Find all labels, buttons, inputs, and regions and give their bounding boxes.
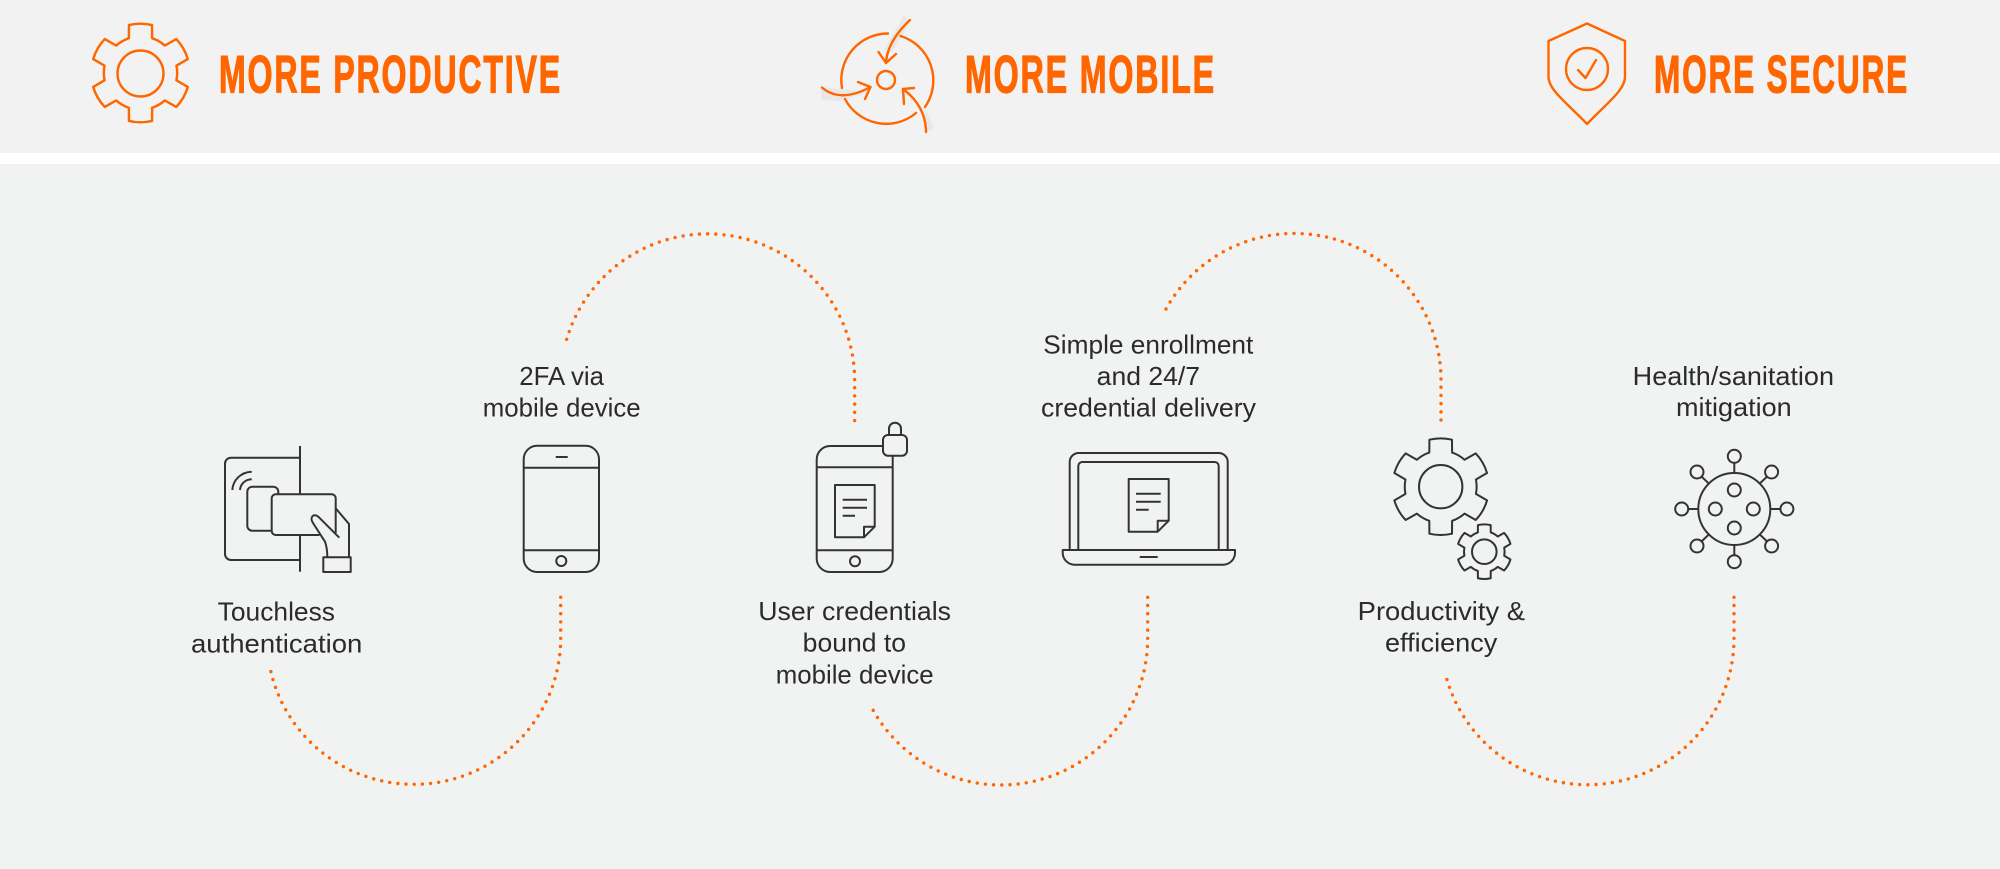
label: user credentials bound to mobile device — [758, 596, 951, 690]
label: 2FA via mobile device — [483, 361, 641, 423]
icon: phone with lock and document — [817, 423, 907, 572]
connector: dotted arc 3 — [872, 597, 1148, 785]
label: health/sanitation mitigation: Health/sanitation — [1633, 361, 1834, 391]
panel: header band — [0, 0, 2000, 153]
label: touchless authentication: authentication — [191, 628, 362, 658]
label: health/sanitation mitigation: mitigation — [1676, 392, 1792, 422]
icon: laptop with document — [1063, 453, 1235, 565]
label: simple enrollment and 24/7 credential delivery: Simple enrollment — [1043, 329, 1254, 359]
label: touchless authentication — [191, 596, 362, 658]
label: 2FA via mobile device: 2FA via — [519, 361, 605, 391]
connector: dotted arc 4 — [1166, 233, 1441, 422]
label: 2FA via mobile device: mobile device — [483, 393, 641, 423]
label: simple enrollment and 24/7 credential delivery: credential delivery — [1041, 393, 1256, 423]
icon: two gears — [1394, 438, 1510, 579]
label: health/sanitation mitigation — [1633, 361, 1834, 422]
connector: dotted arc 2 — [567, 234, 855, 422]
icon: shield with check — [1548, 24, 1625, 124]
connector: dotted arc 5 — [1447, 597, 1734, 785]
label: simple enrollment and 24/7 credential delivery — [1041, 329, 1256, 423]
connector: dotted arc 1 — [271, 597, 561, 784]
label: user credentials bound to mobile device: bound to — [803, 628, 906, 658]
label: touchless authentication: Touchless — [218, 596, 335, 626]
label: productivity and efficiency: efficiency — [1385, 628, 1497, 658]
icon: mobile cycle arrows — [821, 15, 934, 133]
label: productivity and efficiency: Productivity & — [1358, 596, 1525, 626]
label: user credentials bound to mobile device: User credentials — [758, 596, 951, 626]
icon: virus — [1675, 450, 1793, 568]
label: simple enrollment and 24/7 credential delivery: and 24/7 — [1097, 361, 1200, 391]
heading: more mobile: MORE MOBILE — [965, 46, 1216, 104]
icon: orange gear — [93, 24, 188, 122]
label: user credentials bound to mobile device: mobile device — [776, 660, 934, 690]
icon: touchless card reader — [225, 446, 351, 572]
heading: more productive: MORE PRODUCTIVE — [219, 46, 562, 104]
label: productivity and efficiency — [1358, 596, 1525, 658]
icon: smartphone — [524, 446, 599, 572]
